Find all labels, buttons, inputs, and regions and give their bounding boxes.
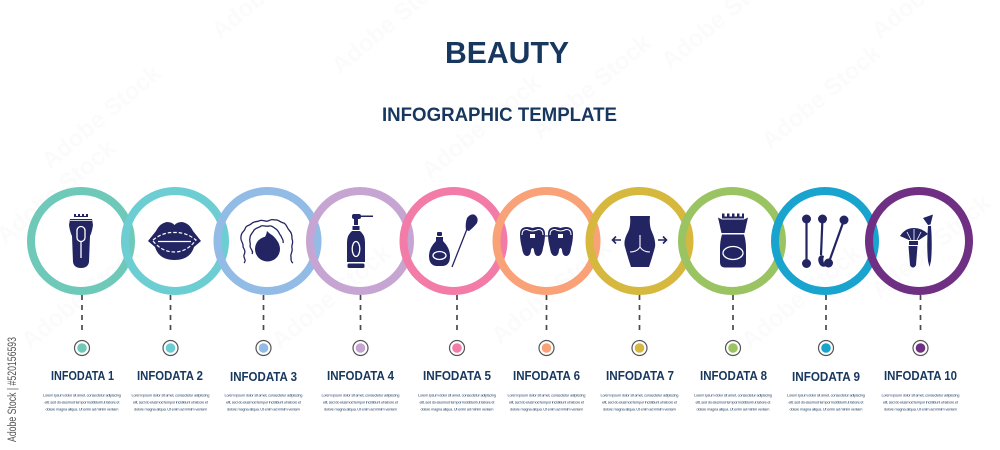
description 10: Lorem ipsum dolor sit amet, consectetur adipiscing xyxy=(882,392,960,398)
ring 10 xyxy=(869,191,969,291)
ring 9 xyxy=(775,191,875,291)
label 5: INFODATA 5 xyxy=(423,368,491,383)
description 5: Lorem ipsum dolor sit amet, consectetur adipiscing xyxy=(418,392,496,398)
description 9 xyxy=(787,392,865,412)
panel: infodata 6 xyxy=(496,191,596,412)
description 7 xyxy=(600,392,678,412)
connector 3 xyxy=(262,295,264,334)
watermark pattern xyxy=(0,0,997,355)
description 6: dolore magna aliqua. Ut enim ad minim veniam xyxy=(510,406,584,412)
marker 2 xyxy=(163,340,178,356)
connector 6 xyxy=(546,295,548,334)
description 2 xyxy=(132,392,210,412)
watermark pattern: Adobe Stock xyxy=(867,189,997,305)
description 3: dolore magna aliqua. Ut enim ad minim veniam xyxy=(227,406,301,412)
description 3: elit, sed do eiusmod tempor incididunt ut labore et xyxy=(226,400,302,404)
connector 1 xyxy=(81,295,83,334)
panel: infodata 5 xyxy=(404,191,504,412)
description 7: elit, sed do eiusmod tempor incididunt ut labore et xyxy=(602,400,678,404)
description 5: elit, sed do eiusmod tempor incididunt ut labore et xyxy=(420,400,495,404)
label 6: INFODATA 6 xyxy=(513,368,580,383)
icon: lips xyxy=(148,222,201,260)
description 8: dolore magna aliqua. Ut enim ad minim veniam xyxy=(696,406,770,412)
panel: infodata 9 xyxy=(775,191,875,412)
label 9: INFODATA 9 xyxy=(792,369,860,384)
ring 5 xyxy=(404,191,504,291)
ring 8 xyxy=(682,191,782,291)
ring 7 xyxy=(590,191,690,291)
watermark pattern: Adobe Stock xyxy=(417,69,547,185)
description 2: Lorem ipsum dolor sit amet, consectetur adipiscing xyxy=(132,392,210,398)
description 1: elit, sed do eiusmod tempor incididunt ut labore et xyxy=(44,400,120,404)
description 9: dolore magna aliqua. Ut enim ad minim veniam xyxy=(790,406,863,412)
connector 8 xyxy=(732,295,734,334)
ring 6 xyxy=(496,191,596,291)
description 8: elit, sed do eiusmod tempor incididunt ut labore et xyxy=(696,400,771,404)
panel: infodata 1 xyxy=(31,191,131,412)
marker 10 xyxy=(913,340,928,356)
ring 1 xyxy=(31,191,131,291)
connector 9 xyxy=(825,295,827,334)
icon: perfume and applicator xyxy=(429,214,478,267)
panel: infodata 10 xyxy=(869,191,969,412)
marker 5 xyxy=(450,340,464,356)
panel: infodata 3 xyxy=(218,191,318,412)
watermark pattern: Adobe Stock xyxy=(37,59,167,175)
description 3 xyxy=(224,392,302,412)
description 4: Lorem ipsum dolor sit amet, consectetur adipiscing xyxy=(322,392,400,398)
description 1: Lorem ipsum dolor sit amet, consectetur adipiscing xyxy=(43,392,121,398)
marker 8 xyxy=(726,340,740,356)
description 9: Lorem ipsum dolor sit amet, consectetur adipiscing xyxy=(787,392,865,398)
marker 1 xyxy=(74,340,90,356)
panel: infodata 7 xyxy=(590,191,690,412)
marker 9 xyxy=(818,340,834,356)
description 4 xyxy=(322,392,400,412)
icon: electric shaver xyxy=(69,214,93,268)
ring 2 xyxy=(125,191,225,291)
icon: cotton swabs xyxy=(802,214,848,268)
icon: braces on teeth xyxy=(520,227,573,256)
watermark pattern: Adobe Stock xyxy=(757,39,887,155)
watermark pattern: Adobe Stock xyxy=(267,239,397,355)
connector 2 xyxy=(170,295,172,334)
label 8: INFODATA 8 xyxy=(700,368,767,383)
description 2: dolore magna aliqua. Ut enim ad minim veniam xyxy=(134,406,208,412)
connector 4 xyxy=(360,295,362,334)
connector 10 xyxy=(920,295,922,334)
stock credit: Adobe Stock | #520156593 xyxy=(7,337,19,442)
description 6: elit, sed do eiusmod tempor incididunt ut labore et xyxy=(509,400,585,404)
label 2: INFODATA 2 xyxy=(137,368,203,383)
description 2: elit, sed do eiusmod tempor incididunt ut labore et xyxy=(133,400,209,404)
ring 4 xyxy=(310,191,410,291)
description 5: dolore magna aliqua. Ut enim ad minim veniam xyxy=(420,406,494,412)
description 6: Lorem ipsum dolor sit amet, consectetur adipiscing xyxy=(508,392,586,398)
watermark pattern: Adobe Stock xyxy=(527,29,657,145)
description 10 xyxy=(882,392,960,412)
marker 3 xyxy=(256,340,271,356)
icon: makeup brushes xyxy=(900,214,933,268)
connector 7 xyxy=(638,295,640,334)
panel: infodata 4 xyxy=(310,191,410,412)
description 4: dolore magna aliqua. Ut enim ad minim veniam xyxy=(324,406,398,412)
label 1: INFODATA 1 xyxy=(51,368,114,383)
label 3: INFODATA 3 xyxy=(230,369,297,384)
description 1 xyxy=(43,392,121,412)
description 7: dolore magna aliqua. Ut enim ad minim veniam xyxy=(603,406,677,412)
icon: hips with arrows xyxy=(612,216,666,267)
watermark pattern: Adobe Stock xyxy=(487,234,617,350)
description 8: Lorem ipsum dolor sit amet, consectetur adipiscing xyxy=(694,392,772,398)
marker 7 xyxy=(632,340,647,356)
marker 4 xyxy=(353,340,368,356)
label 7: INFODATA 7 xyxy=(606,368,674,383)
connector 5 xyxy=(456,295,458,334)
subtitle: INFOGRAPHIC TEMPLATE xyxy=(382,104,617,126)
watermark pattern: Adobe Stock xyxy=(17,239,147,355)
title: BEAUTY xyxy=(445,35,569,70)
marker 6 xyxy=(539,340,554,356)
description 4: elit, sed do eiusmod tempor incididunt ut labore et xyxy=(323,400,399,404)
description 1: dolore magna aliqua. Ut enim ad minim veniam xyxy=(46,406,119,412)
description 7: Lorem ipsum dolor sit amet, consectetur adipiscing xyxy=(600,392,678,398)
description 10: dolore magna aliqua. Ut enim ad minim veniam xyxy=(884,406,958,412)
label 4: INFODATA 4 xyxy=(327,368,395,383)
description 10: elit, sed do eiusmod tempor incididunt ut labore et xyxy=(883,400,959,404)
label 10: INFODATA 10 xyxy=(884,368,957,383)
description 5 xyxy=(418,392,496,412)
icon: trimmer jar xyxy=(718,214,748,268)
watermark pattern: Adobe Stock xyxy=(737,239,867,355)
ring 3 xyxy=(218,191,318,291)
description 6 xyxy=(508,392,586,412)
icon: curly hair xyxy=(241,220,293,263)
description 9: elit, sed do eiusmod tempor incididunt ut labore et xyxy=(788,400,864,404)
panel: infodata 8 xyxy=(682,191,782,412)
description 8 xyxy=(694,392,772,412)
panel: infodata 2 xyxy=(125,191,225,412)
icon: pump bottle xyxy=(347,214,373,268)
description 3: Lorem ipsum dolor sit amet, consectetur adipiscing xyxy=(224,392,302,398)
